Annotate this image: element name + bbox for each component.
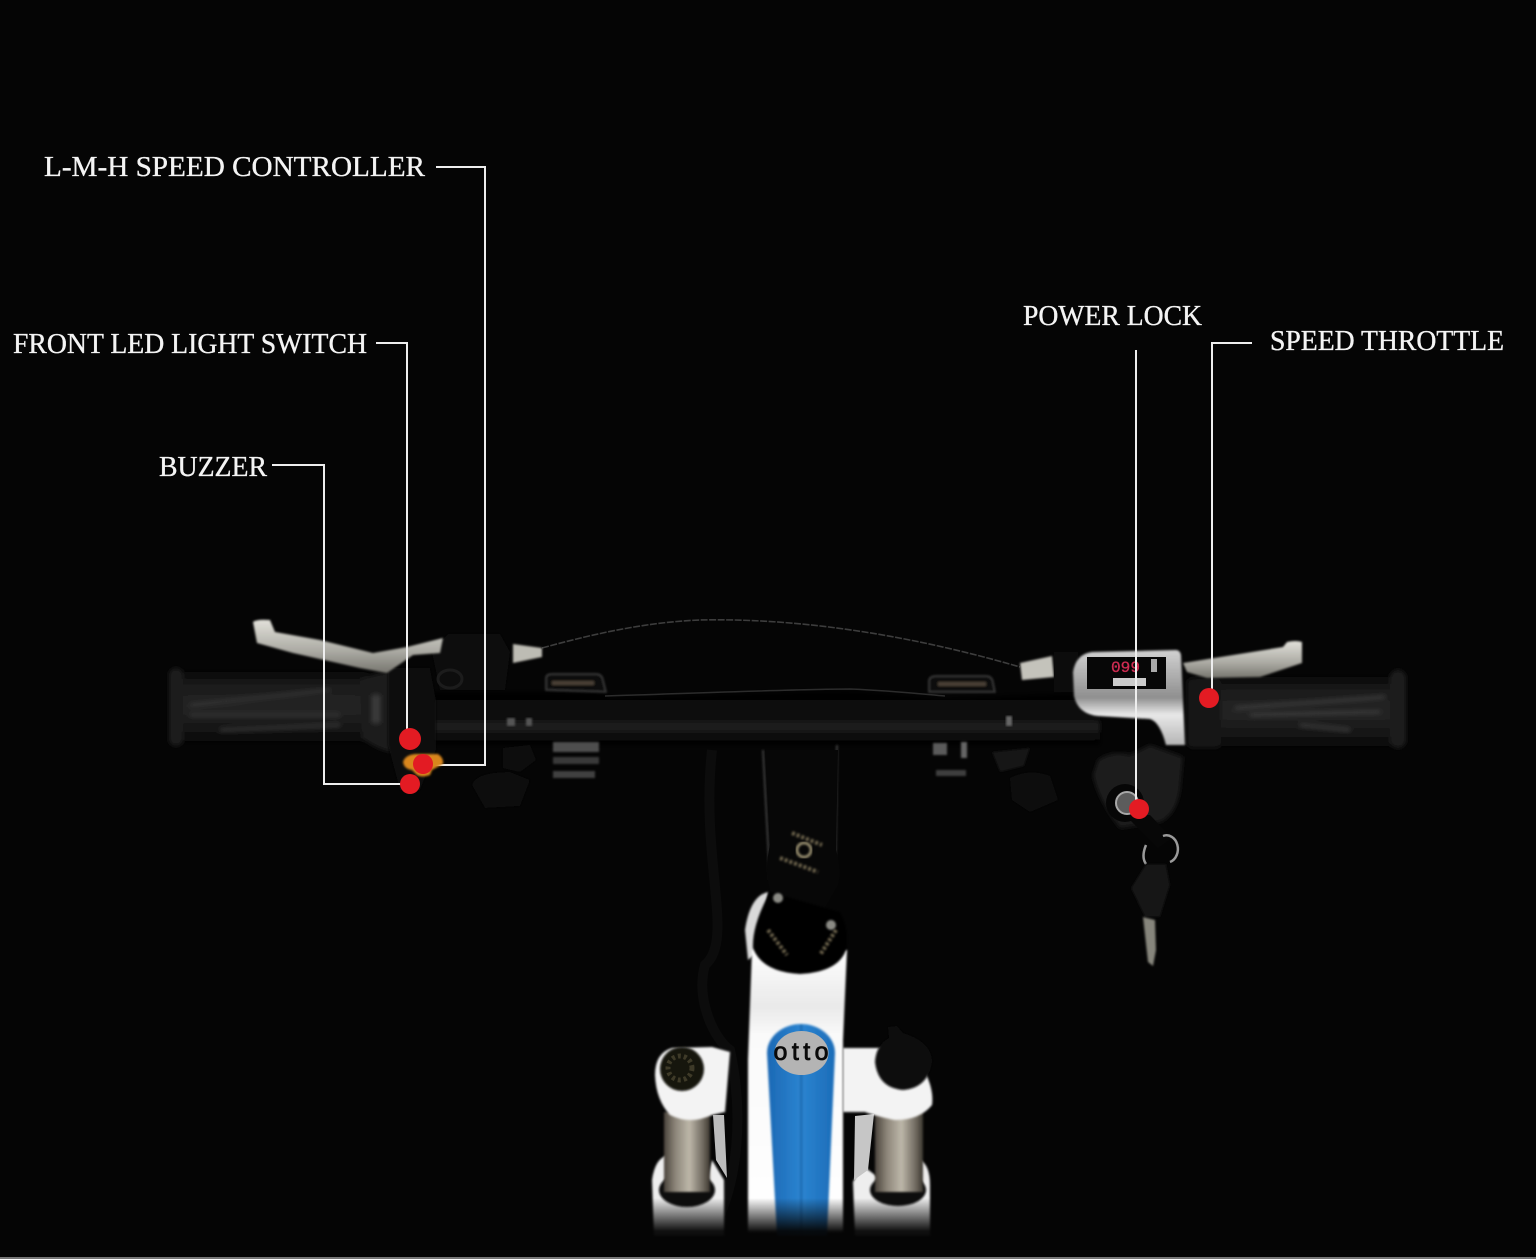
upper bar edge highlight	[605, 689, 945, 696]
callout: L-M-H speed controller	[44, 151, 485, 765]
headset gold marks	[768, 930, 836, 955]
left brake lever	[253, 620, 443, 673]
logo badge	[774, 1031, 828, 1075]
display screen	[1087, 657, 1166, 689]
right lower seal	[870, 1174, 926, 1206]
leader line	[1212, 343, 1252, 690]
left grip	[169, 668, 392, 752]
callout: buzzer	[159, 451, 402, 784]
leader line	[376, 343, 407, 730]
left fork cap	[660, 1047, 704, 1091]
handlebar assembly	[169, 620, 1406, 966]
left brake clamp	[432, 634, 510, 690]
right grip	[1187, 670, 1406, 748]
right fork lower	[853, 1160, 930, 1236]
key lock silver ring	[1116, 792, 1138, 814]
left cap texture	[668, 1056, 692, 1080]
centre handlebar tube	[430, 691, 1100, 745]
frame side shoulder	[745, 892, 768, 960]
leader line	[272, 465, 402, 784]
brake cable	[542, 620, 1020, 667]
callout: front LED light switch	[13, 328, 407, 730]
label text: POWER LOCK	[1023, 300, 1202, 332]
main white head tube	[748, 950, 847, 1232]
silver display housing	[1073, 650, 1185, 745]
dot: front LED switch	[399, 728, 421, 750]
display mount dark block	[1054, 652, 1078, 692]
key lock housing	[1093, 745, 1183, 828]
display digits: 099	[1111, 659, 1140, 677]
display label	[1113, 678, 1146, 686]
key ring	[1144, 835, 1178, 864]
clamp ring detail	[438, 670, 462, 688]
dot: power lock	[1129, 799, 1149, 819]
stem cap bolt	[797, 843, 811, 857]
left fork crown	[655, 1047, 730, 1120]
left shifter pod	[472, 674, 606, 808]
label text: SPEED THROTTLE	[1270, 325, 1504, 357]
left bar hardware dots	[507, 718, 532, 726]
dot: speed controller	[413, 754, 433, 774]
bottom fade	[630, 1198, 950, 1242]
right shifter pod	[929, 676, 1058, 812]
label text: BUZZER	[159, 451, 268, 483]
right fork knob	[875, 1026, 932, 1090]
callout: speed throttle	[1212, 325, 1504, 690]
stem body	[765, 750, 840, 925]
right fork crown	[843, 1048, 932, 1120]
right fork stanchion	[875, 1112, 923, 1192]
display battery icon	[1151, 659, 1157, 672]
key blade	[1143, 917, 1156, 966]
bike front frame and fork	[630, 745, 950, 1242]
right brake lever	[1183, 641, 1302, 678]
left switch housing	[388, 668, 436, 790]
key insert	[1125, 815, 1172, 848]
stem cap lettering marks	[780, 833, 822, 872]
left lower seal	[659, 1173, 715, 1207]
left cable barrel	[513, 644, 542, 663]
key fob	[1131, 864, 1170, 917]
headset	[753, 892, 847, 974]
key lock barrel	[1106, 784, 1144, 822]
right cable barrel	[1020, 656, 1054, 680]
left crown strut	[713, 1115, 727, 1178]
label text: FRONT LED LIGHT SWITCH	[13, 328, 367, 360]
dot: speed throttle	[1199, 688, 1219, 708]
leader line	[433, 167, 485, 765]
cable loom	[702, 750, 737, 1215]
bottom edge strip	[0, 1257, 1536, 1259]
leader line	[1135, 350, 1137, 802]
right crown strut	[854, 1114, 874, 1180]
right bar hardware	[1006, 716, 1012, 726]
logo wordmark: otto	[774, 1038, 828, 1066]
dot: buzzer	[400, 774, 420, 794]
headset bolts	[773, 893, 836, 930]
marker dots	[399, 688, 1219, 819]
left fork lower	[652, 1155, 724, 1236]
blue stripe	[767, 1024, 835, 1236]
label text: L-M-H SPEED CONTROLLER	[44, 151, 426, 183]
left fork stanchion	[664, 1112, 710, 1192]
orange switch	[403, 754, 443, 776]
stem bright edges	[763, 745, 837, 880]
